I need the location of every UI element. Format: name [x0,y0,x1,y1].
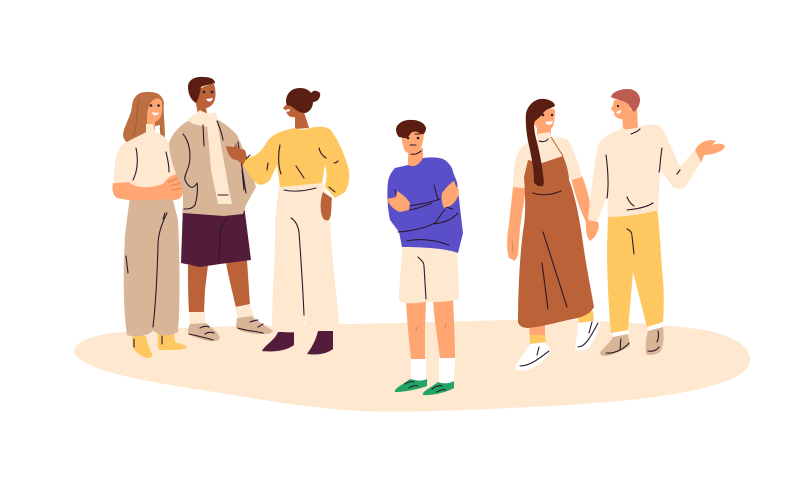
legs [188,260,250,313]
dress lines [533,139,567,309]
legs [406,300,455,360]
hair [526,99,555,186]
neck [408,148,423,167]
face details [150,104,160,115]
socks [612,321,664,338]
face details [542,114,553,125]
hair [611,89,640,112]
neck [622,108,638,130]
sneakers [395,379,454,395]
sweater [243,127,349,198]
jacket [169,118,256,216]
hair [188,77,215,103]
shoes [132,334,187,358]
neck [537,120,551,136]
trousers [124,196,180,336]
sweater lines [246,145,338,192]
shoe lines [134,336,162,347]
face and neck [283,101,309,129]
right hand [442,181,459,208]
hair [123,92,165,148]
ground blob [74,320,750,412]
person: woman in brown dress [507,99,600,371]
face details [616,105,621,114]
joined hand [588,221,599,239]
hood collar [188,110,218,127]
sweater [588,125,701,222]
shoes [188,316,273,341]
socks [411,358,455,383]
dress [518,156,594,328]
trousers [272,182,339,332]
trousers [607,208,664,333]
right arm [571,176,598,241]
finger lines [512,228,592,252]
hair strands [134,100,162,136]
shorts [399,245,459,303]
left arm [507,187,526,261]
sneaker lines [520,322,598,366]
person: man in cream sweater [588,89,725,356]
trouser lines [284,188,316,315]
shorts seam [219,218,228,262]
shoes [600,327,664,356]
face details [203,91,213,102]
person: woman in tan trousers [112,92,187,358]
shoe lines [606,331,659,353]
sweater lines [606,129,680,210]
jacket lines [183,121,246,209]
trouser seam [627,229,634,254]
shorts seam [418,257,426,299]
shorts [181,205,251,267]
top [114,124,180,196]
face [401,130,424,154]
left leg and sock [529,322,546,345]
sweater [387,157,463,253]
shoe lines [189,320,263,340]
right sock [577,311,594,323]
socks [189,304,254,325]
person: woman in yellow sweater [226,88,349,354]
left sneaker [515,342,551,371]
top [513,132,582,188]
trouser creases [126,213,167,327]
face details [407,134,421,154]
face [533,108,555,131]
right sneaker [575,321,600,351]
hair [286,88,320,113]
arm and hand [112,175,183,200]
left hand [387,191,410,212]
face [611,100,631,119]
strap [551,137,563,156]
person: boy in blue sweater [387,120,463,395]
face details [285,103,290,112]
hair [396,120,426,138]
person: man in beige jacket [169,77,273,341]
top lines [133,148,169,180]
face and neck [195,84,216,120]
knee marks [416,323,446,331]
hand on hip [321,192,332,220]
finger lines [168,178,182,190]
shirt [207,122,232,204]
sneaker lines [405,382,446,392]
sweater lines [395,185,458,245]
face and neck [147,98,162,132]
hand pointing [226,143,247,165]
boots [262,331,333,354]
right hand [695,140,725,163]
